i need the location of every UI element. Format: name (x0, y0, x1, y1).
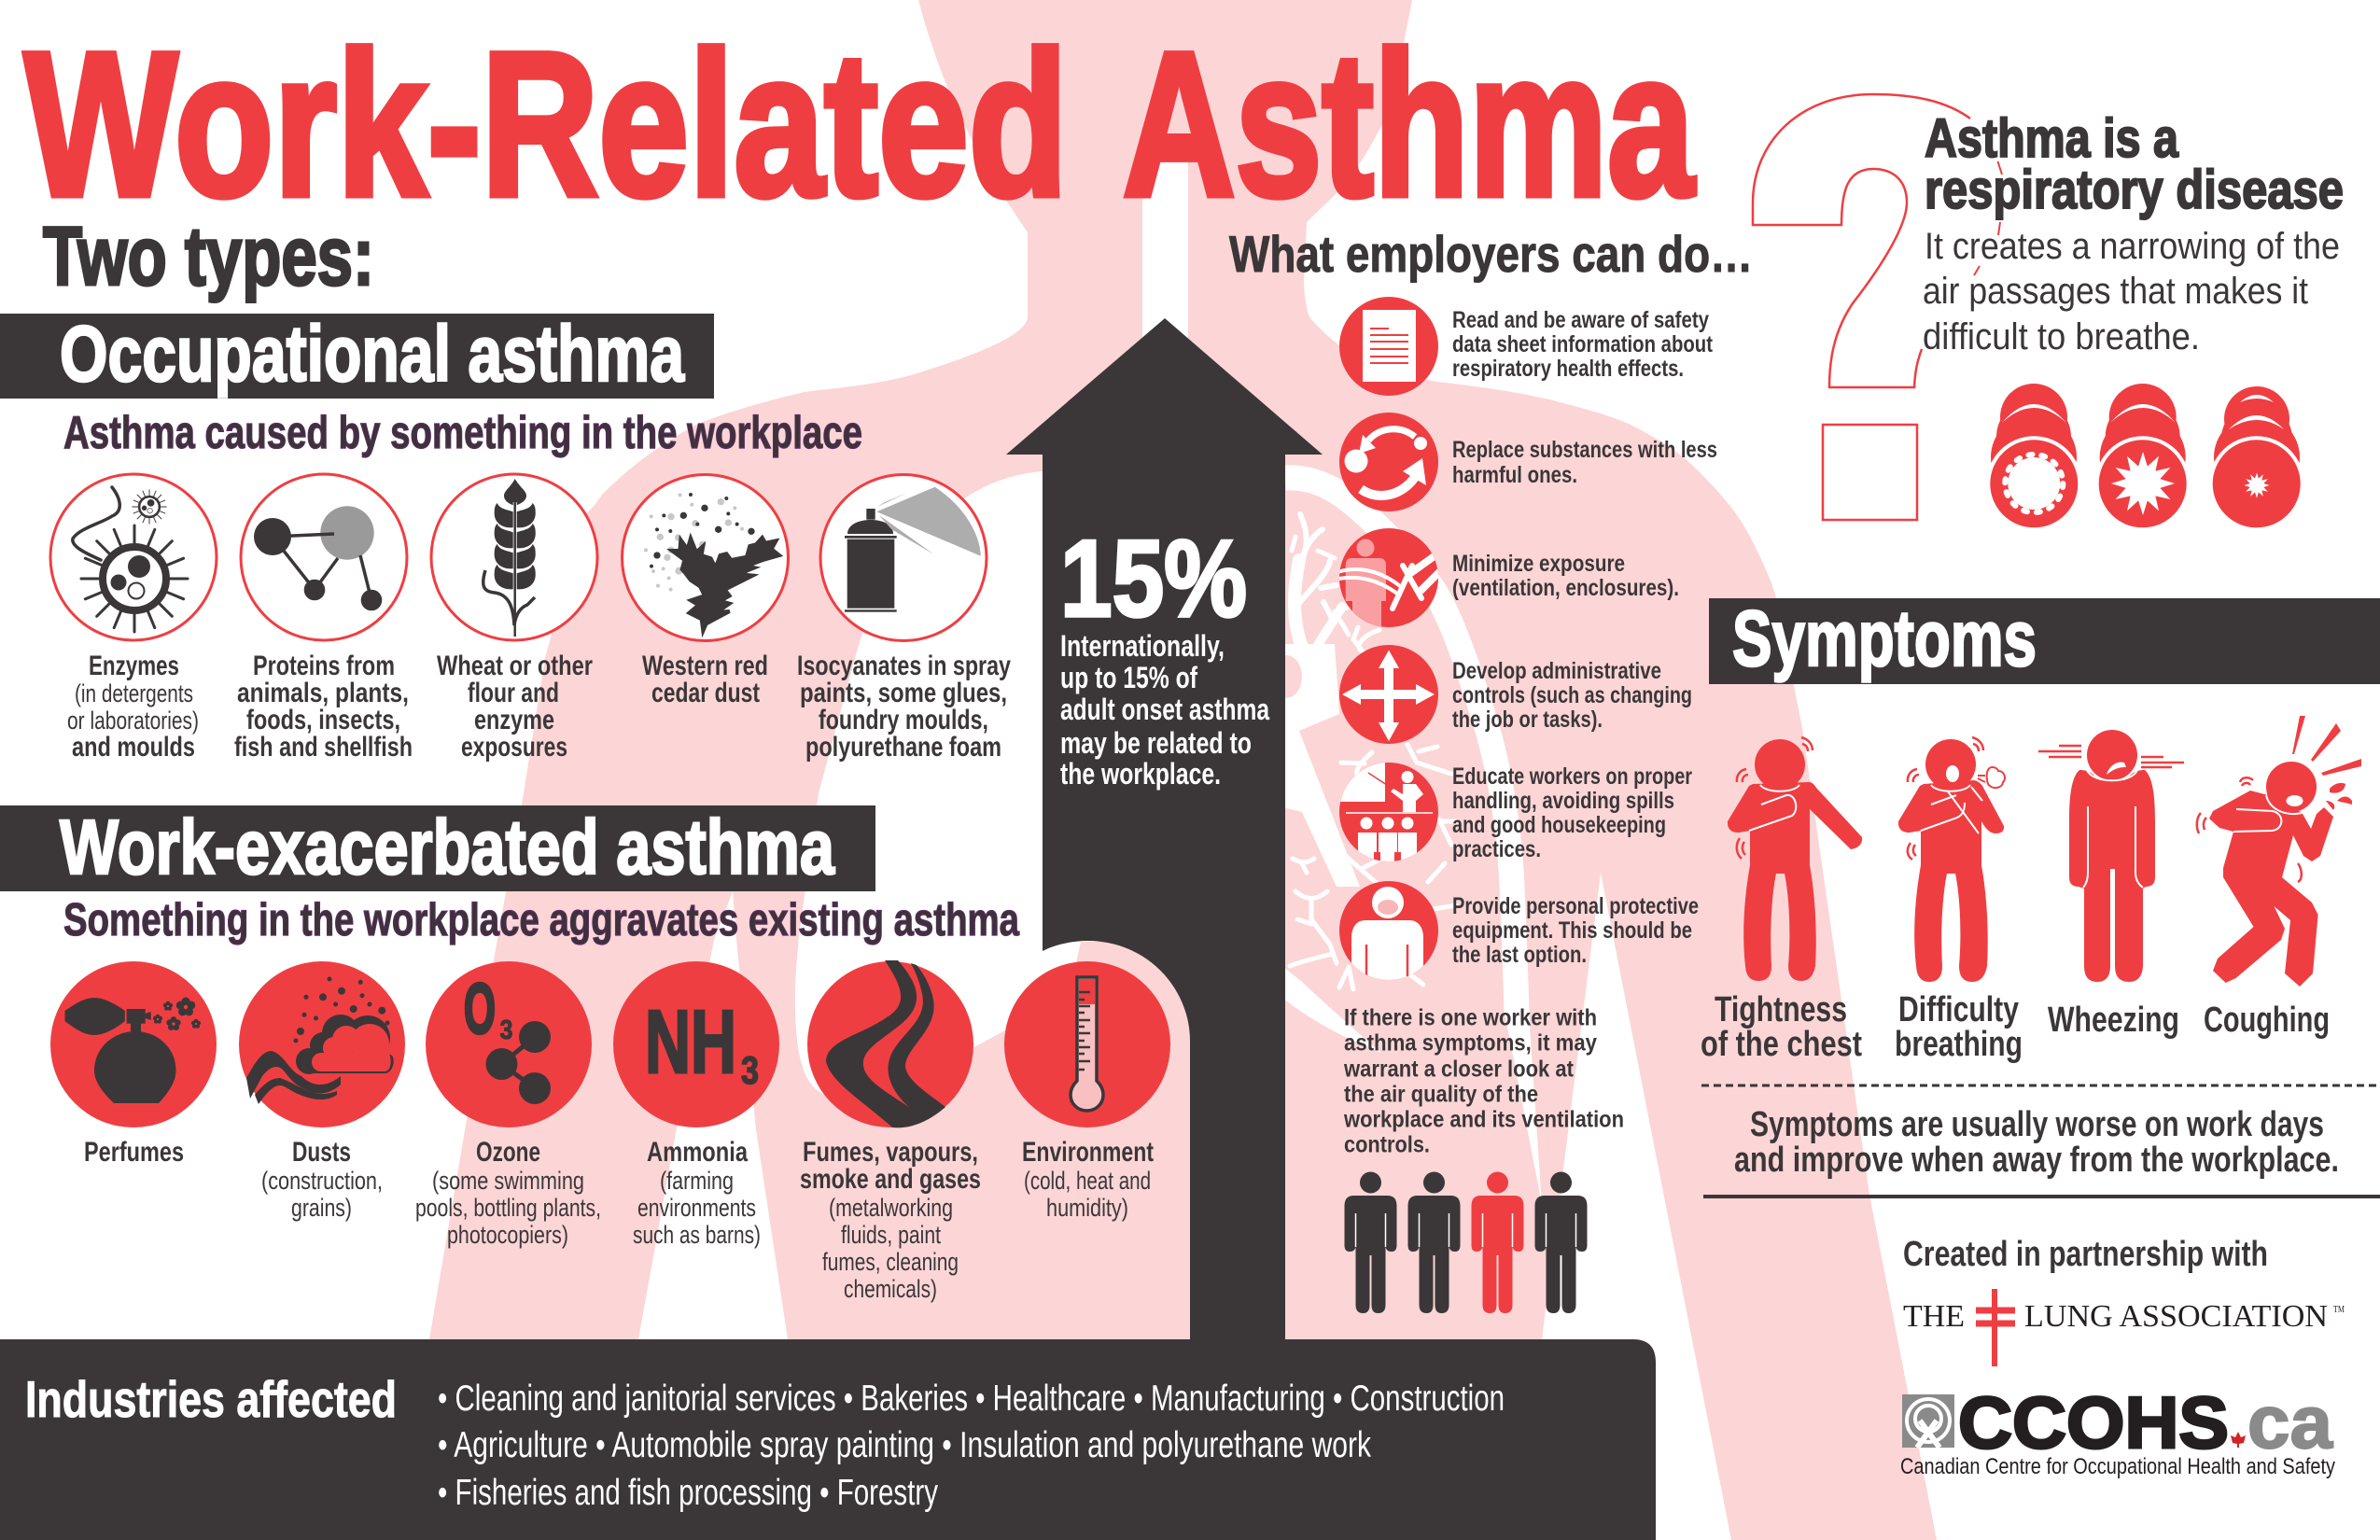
icon: proteins (241, 474, 407, 640)
icon: enzymes (50, 474, 217, 640)
caption: proteins: foods, insects, (246, 705, 400, 735)
text: one worker with asthma symptoms: If there is one worker with (1344, 1004, 1597, 1030)
statistic: 15 percent: 15% (1060, 517, 1247, 639)
caption: wheat: flour and (468, 678, 559, 708)
text: safety data sheet (1452, 307, 1714, 382)
text: one worker with asthma symptoms: workplace and its ventilation (1343, 1107, 1624, 1133)
subheading: occupational asthma: Asthma caused by something in the workplace (63, 408, 862, 458)
caption: wheat: exposures (461, 732, 567, 763)
text: asthma description: It creates a narrowing of the (1925, 226, 2340, 267)
caption: wheat: enzyme (474, 705, 554, 735)
caption: ozone: pools, bottling plants, (415, 1194, 601, 1222)
caption: fumes (800, 1137, 981, 1303)
caption: ozone: (some swimming (432, 1167, 584, 1195)
text: replace substances: Replace substances with less (1452, 437, 1717, 463)
background: white trachea (1142, 159, 1188, 345)
text: educate workers: handling, avoiding spills (1452, 788, 1674, 814)
industries list: • Agriculture • Automobile spray painting • Insulation and polyurethane work (438, 1425, 1371, 1465)
statistic description: may be related to (1060, 726, 1252, 760)
heading: asthma is a respiratory disease (1925, 108, 2344, 220)
caption: difficulty breathing: breathing (1895, 1025, 2023, 1064)
caption: perfumes: Perfumes (84, 1137, 184, 1168)
icon: severely narrowed airway (2209, 386, 2304, 531)
caption: fumes: chemicals) (844, 1275, 937, 1303)
caption: environment (1022, 1137, 1154, 1222)
caption: wheat (437, 651, 593, 763)
caption: enzymes (67, 651, 199, 763)
caption: dusts: Dusts (292, 1137, 351, 1168)
text: administrative controls: the job or tasks). (1452, 707, 1603, 733)
banner: work-exacerbated asthma: Work-exacerbated asthma (60, 804, 835, 890)
icon: ammonia: NH (645, 992, 736, 1092)
text: administrative controls (1452, 658, 1692, 733)
text: personal protective equipment: Provide personal protective (1452, 893, 1699, 919)
industries list: • Cleaning and janitorial services • Bakeries • Healthcare • Manufacturing • Construction (438, 1379, 1505, 1419)
icon: spray can (820, 474, 987, 640)
background: pink human body silhouette, left part (429, 0, 1213, 1339)
caption: ozone: photocopiers) (447, 1221, 568, 1249)
industries affected heading: Industries affected (25, 1370, 397, 1428)
logo: the lung association: TM (2333, 1305, 2345, 1315)
text: administrative controls: Develop administrative (1452, 658, 1661, 684)
statistic description: adult onset asthma (1060, 693, 1269, 726)
logo: CCOHS: ca (2247, 1380, 2333, 1463)
icon: administrative controls arrows (1339, 645, 1438, 744)
caption: cedar dust (642, 651, 768, 708)
text: educate workers: Educate workers on proper (1452, 763, 1692, 790)
statistic description (1060, 629, 1269, 791)
heading: what employers can do: What employers can do… (1229, 225, 1753, 283)
text: safety data sheet: data sheet information about (1452, 331, 1714, 357)
icon: personal protective equipment (1339, 881, 1438, 985)
text: replace substances: harmful ones. (1452, 462, 1577, 488)
text: minimize exposure: (ventilation, enclosures). (1452, 575, 1679, 601)
caption: cedar dust: Western red (642, 651, 768, 681)
caption: fumes: fluids, paint (841, 1221, 941, 1249)
caption: proteins (234, 651, 413, 763)
icon: educate workers (1339, 763, 1438, 861)
caption: ozone: Ozone (476, 1137, 540, 1168)
icon: wheezing figure (2038, 730, 2184, 982)
caption: enzymes: and moulds (72, 732, 195, 763)
icon: difficulty breathing figure (1898, 737, 2005, 982)
icon: narrowed airway (2095, 384, 2191, 531)
caption: dusts: (construction, (261, 1167, 383, 1195)
caption: isocyanates: foundry moulds, (819, 705, 988, 735)
caption: dusts: grains) (291, 1194, 352, 1222)
statistic description: up to 15% of (1060, 661, 1197, 694)
heading: asthma is a respiratory disease: Asthma is a (1925, 108, 2179, 169)
icon: thermometer (1004, 961, 1170, 1127)
text: minimize exposure (1452, 551, 1679, 601)
logo: the lung association (1903, 1289, 2345, 1366)
caption: cedar dust: cedar dust (651, 678, 760, 708)
icon: question mark outline (1753, 94, 2002, 520)
text: safety data sheet: respiratory health effects. (1452, 356, 1684, 382)
statistic description: Internationally, (1060, 629, 1225, 663)
text: one worker with asthma symptoms (1343, 1004, 1624, 1157)
caption: ammonia: such as barns) (633, 1221, 761, 1249)
caption: tightness of the chest (1701, 990, 1862, 1064)
caption: fumes: fumes, cleaning (822, 1248, 959, 1276)
icon: ozone: O (464, 970, 496, 1049)
banner: symptoms: Symptoms (1732, 595, 2037, 682)
title: Work-Related (24, 9, 1068, 239)
heading: two types: Two types: (43, 209, 374, 302)
statistic description: the workplace. (1060, 757, 1221, 791)
text: safety data sheet: Read and be aware of safety (1452, 307, 1709, 333)
industries bar background (0, 1339, 1656, 1540)
logo: CCOHS: CCOHS (1958, 1381, 2229, 1463)
caption: isocyanates (797, 651, 1011, 763)
caption: isocyanates: paints, some glues, (800, 678, 1007, 708)
logo: the lung association: THE (1903, 1299, 1965, 1334)
caption: wheat: Wheat or other (437, 651, 593, 681)
caption: tightness of the chest: Tightness (1715, 990, 1847, 1029)
caption: tightness of the chest: of the chest (1701, 1025, 1862, 1064)
icon: coughing figure (2197, 716, 2361, 987)
banner: symptoms (1709, 595, 2380, 684)
text: replace substances (1452, 437, 1717, 488)
text: personal protective equipment: equipment. This should be (1452, 917, 1692, 944)
icon: normal airway (1986, 384, 2081, 531)
icon: western red cedar dust (622, 474, 788, 640)
dark up arrow with arched cut-out (1006, 318, 1323, 1344)
icon: wheat (431, 474, 597, 640)
text: created in partnership: Created in partnership with (1903, 1235, 2268, 1274)
caption: dusts (261, 1137, 383, 1222)
caption: fumes: smoke and gases (800, 1164, 981, 1195)
subheading: work-exacerbated asthma: Something in the workplace aggravates existing asthma (63, 895, 1020, 945)
banner: occupational asthma: Occupational asthma (60, 310, 685, 398)
icon: ozone: 3 (500, 1015, 513, 1045)
text: personal protective equipment: the last option. (1452, 942, 1587, 968)
text: administrative controls: controls (such as changing (1452, 682, 1692, 708)
icon: dust cloud (239, 961, 405, 1127)
caption: enzymes: Enzymes (89, 651, 179, 681)
caption: difficulty breathing: Difficulty (1898, 990, 2019, 1029)
text: one worker with asthma symptoms: the air quality of the (1344, 1081, 1538, 1107)
logo: the lung association: LUNG ASSOCIATION (2024, 1299, 2328, 1334)
title: Asthma (1123, 9, 1695, 239)
industries list (438, 1379, 1505, 1513)
text: one worker with asthma symptoms: asthma symptoms, it may (1344, 1030, 1597, 1057)
caption: environment: humidity) (1046, 1194, 1128, 1222)
caption: isocyanates: polyurethane foam (805, 732, 1001, 763)
logo: CCOHS (1900, 1380, 2335, 1479)
background: white bronchial tree of the lung (1270, 478, 1542, 1204)
icon: four workers, one highlighted (1344, 1172, 1587, 1313)
text: asthma description: air passages that makes it (1923, 271, 2308, 312)
text: one worker with asthma symptoms: warrant a closer look at (1343, 1057, 1575, 1083)
text: symptoms note (1734, 1105, 2339, 1180)
caption: ammonia: Ammonia (647, 1137, 748, 1168)
caption: environment: Environment (1022, 1137, 1154, 1168)
caption: enzymes: or laboratories) (67, 707, 199, 735)
caption: fumes: (metalworking (829, 1194, 953, 1222)
caption: isocyanates: Isocyanates in spray (797, 651, 1011, 681)
icon: tightness of the chest figure (1728, 737, 1862, 981)
icon: ozone (426, 961, 592, 1127)
icon: safety data sheet (1339, 297, 1438, 396)
text: one worker with asthma symptoms: controls. (1344, 1131, 1430, 1157)
caption: difficulty breathing (1895, 990, 2023, 1064)
caption: proteins: Proteins from (253, 651, 395, 681)
caption: coughing: Coughing (2204, 1001, 2330, 1040)
background: pink human body silhouette, right part (1213, 0, 1937, 1540)
industries list: • Fisheries and fish processing • Forestry (438, 1473, 938, 1513)
icon: minimize exposure (1339, 528, 1438, 627)
icon: fumes (807, 960, 973, 1127)
text: educate workers: and good housekeeping (1452, 812, 1666, 838)
caption: ammonia: environments (637, 1194, 756, 1222)
text: asthma description: difficult to breathe. (1923, 316, 2200, 357)
text: asthma description (1923, 226, 2340, 357)
text: educate workers (1452, 763, 1692, 862)
text: educate workers: practices. (1452, 836, 1541, 862)
icon: perfume (50, 961, 217, 1127)
caption: enzymes: (in detergents (75, 679, 193, 707)
caption: environment: (cold, heat and (1024, 1167, 1151, 1195)
icon: ammonia: 3 (741, 1048, 759, 1092)
text: minimize exposure: Minimize exposure (1452, 551, 1625, 577)
caption: ammonia: (farming (660, 1167, 734, 1195)
caption: ozone (415, 1137, 601, 1249)
icon: ammonia (613, 961, 779, 1127)
caption: ammonia (633, 1137, 761, 1249)
caption: proteins: animals, plants, (237, 678, 409, 708)
icon: replace substances (1339, 413, 1438, 511)
caption: wheezing: Wheezing (2048, 1001, 2179, 1040)
caption: proteins: fish and shellfish (234, 732, 413, 763)
text: personal protective equipment (1452, 893, 1699, 968)
caption: fumes: Fumes, vapours, (803, 1137, 978, 1168)
